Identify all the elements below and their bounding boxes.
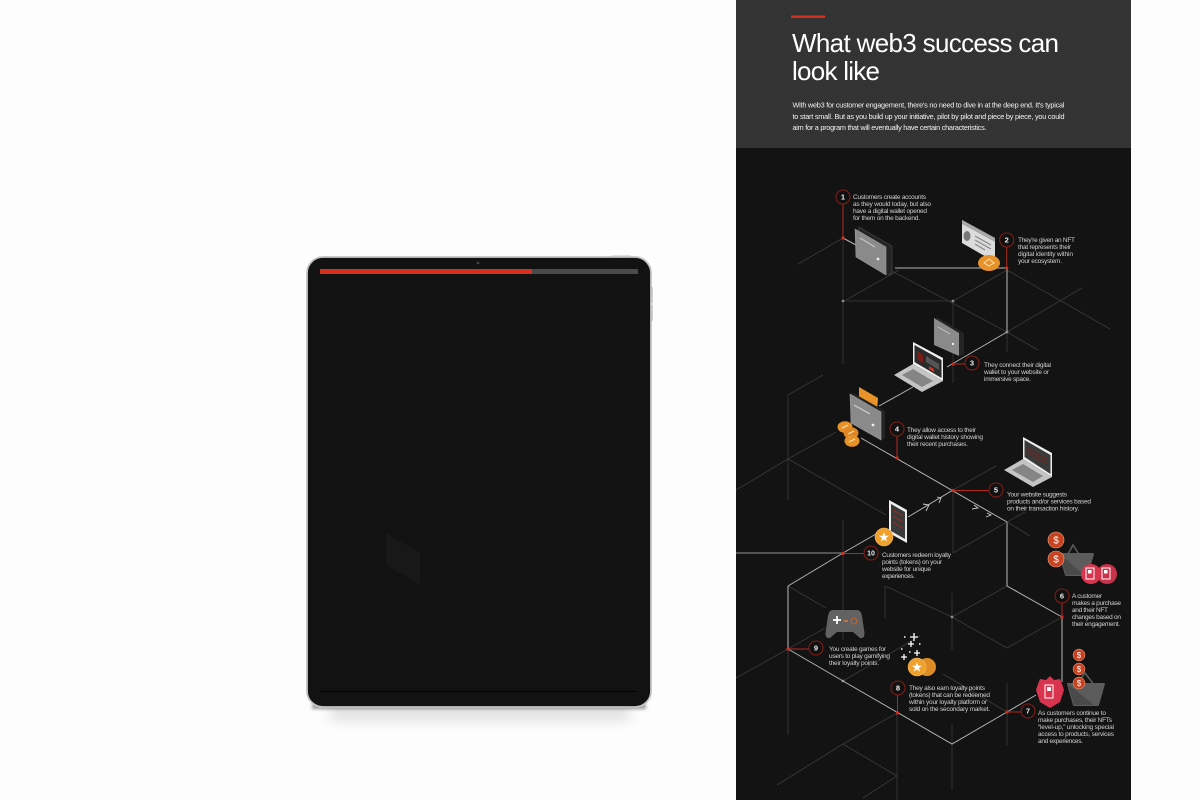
flow arrows xyxy=(923,497,991,517)
tablet progress bar xyxy=(320,269,638,274)
icon: basket with coins and NFT tokens: $ xyxy=(1053,536,1059,546)
intro text: With web3 for customer engagement, there's no need to dive in at the deep end. It's typical xyxy=(792,100,1065,110)
step 10: Customers redeem loyalty xyxy=(882,552,952,559)
step 7: “level-up,” unlocking special xyxy=(1038,724,1115,731)
step 7: As customers continue to xyxy=(1038,710,1106,717)
icon: laptop with website xyxy=(894,342,943,392)
step 8: (tokens) that can be redeemed xyxy=(909,692,990,699)
icon: wallet with history xyxy=(838,387,885,447)
panel: dark infographic column xyxy=(736,0,1131,800)
icon: wallet xyxy=(855,227,892,275)
step 9: users to play gamifying xyxy=(829,653,890,660)
title: What web3 success can xyxy=(792,28,1059,58)
step 2: that represents their xyxy=(1018,244,1072,251)
step 1: as they would today, but also xyxy=(853,201,931,208)
isometric background grid xyxy=(736,238,1110,800)
step 4: their recent purchases. xyxy=(907,441,968,448)
step 10 xyxy=(841,500,952,580)
step 10: experiences. xyxy=(882,573,915,580)
step 9 xyxy=(786,610,890,667)
step 5: Your website suggests xyxy=(1007,492,1068,498)
step 6: makes a purchase xyxy=(1072,600,1121,607)
intro text: to start small. But as you build up your initiative, pilot by pilot and piece by piece, you could xyxy=(792,112,1064,121)
step 5: on their transaction history. xyxy=(1007,506,1079,512)
icon: basket with coins and NFT tokens: $ xyxy=(1053,554,1059,566)
step 6 xyxy=(1048,532,1121,628)
title: look like xyxy=(792,56,880,86)
step 2: digital identity within xyxy=(1018,251,1073,258)
step 6: 6 xyxy=(1060,592,1064,601)
step 9: 9 xyxy=(814,644,818,653)
step 10: points (tokens) on your xyxy=(882,559,943,566)
step 8: 8 xyxy=(896,684,900,693)
step 6: their engagement. xyxy=(1072,621,1120,628)
icon: levelled-up NFT badge and basket: $ xyxy=(1077,651,1082,660)
icon: levelled-up NFT badge and basket: $ xyxy=(1077,679,1082,688)
step 3: They connect their digital xyxy=(984,362,1052,369)
step 9: their loyalty points. xyxy=(829,660,879,667)
step 3: wallet to your website or xyxy=(983,369,1050,376)
icon: levelled-up NFT badge and basket xyxy=(1036,649,1104,708)
intro text: aim for a program that will eventually have certain characteristics. xyxy=(792,123,986,132)
icon: wallet small xyxy=(934,317,964,356)
step 8 xyxy=(891,633,990,715)
step 7: and experiences. xyxy=(1038,738,1083,745)
step 9: You create games for xyxy=(829,646,887,653)
step 8: They also earn loyalty points xyxy=(909,685,986,692)
step 3: immersive space. xyxy=(984,376,1031,383)
icon: tablet with star coin: ★ xyxy=(878,530,890,544)
step 1: have a digital wallet opened xyxy=(853,208,927,215)
icon: NFT identity card xyxy=(962,220,1000,271)
step 2: your ecosystem. xyxy=(1018,258,1062,265)
step 6: changes based on xyxy=(1072,614,1121,621)
step 5 xyxy=(951,437,1091,512)
step 4: 4 xyxy=(895,425,900,434)
step 7: make purchases, their NFTs xyxy=(1038,717,1113,724)
step 2: 2 xyxy=(1005,236,1009,245)
step 7: 7 xyxy=(1026,707,1030,716)
step 2: They're given an NFT xyxy=(1018,237,1075,244)
step 3 xyxy=(894,317,1052,392)
step 8: sold on the secondary market. xyxy=(909,706,990,713)
step 4: digital wallet history showing xyxy=(907,434,983,441)
title xyxy=(792,28,1059,86)
step 1: for them on the backend. xyxy=(853,215,920,222)
step 5: 5 xyxy=(994,486,998,495)
tablet device xyxy=(307,256,653,720)
step 10: 10 xyxy=(867,551,875,558)
icon: sparkling loyalty coins: ★ xyxy=(911,660,923,674)
icon: game controller xyxy=(826,610,864,638)
step 6: A customer xyxy=(1072,593,1103,600)
step 8: within your loyalty platform or xyxy=(908,699,988,706)
step 5: products and/or services based xyxy=(1007,498,1091,506)
icon: laptop with suggestions xyxy=(1004,437,1052,487)
panel: header band xyxy=(736,0,1131,148)
step 6: and their NFT xyxy=(1072,607,1108,614)
step 4 xyxy=(838,387,983,460)
step 3: 3 xyxy=(970,359,974,368)
step 1: 1 xyxy=(841,193,845,202)
step 1: Customers create accounts xyxy=(853,194,927,201)
step 7: access to products, services xyxy=(1038,731,1115,738)
step 10: website for unique xyxy=(881,566,931,573)
step 1 xyxy=(836,190,931,275)
icon: levelled-up NFT badge and basket: $ xyxy=(1077,665,1082,674)
journey path lines xyxy=(736,238,1062,744)
icon: basket with coins and NFT tokens xyxy=(1048,532,1117,584)
intro text xyxy=(792,100,1065,132)
step 2 xyxy=(962,220,1075,271)
step 4: They allow access to their xyxy=(907,427,977,434)
step 7 xyxy=(1005,649,1115,745)
